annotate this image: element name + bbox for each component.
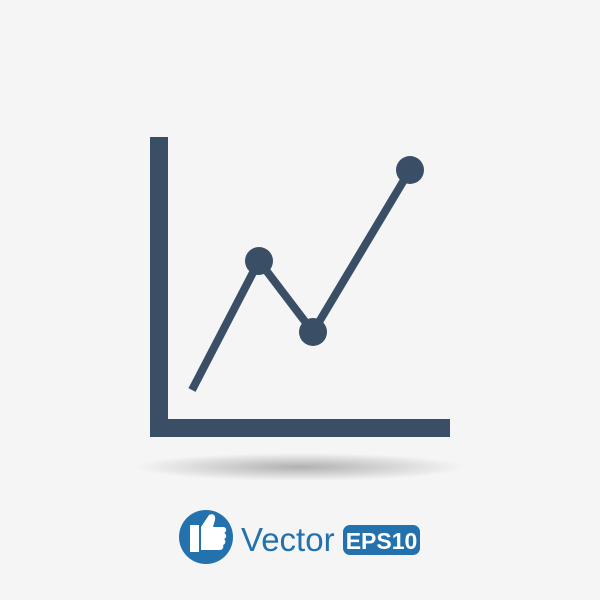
icon: thumbs up (179, 510, 233, 564)
badge: EPS10: EPS10 (346, 528, 417, 554)
logo: vector eps10 (179, 510, 420, 564)
trend line (192, 170, 410, 390)
shadow under chart (135, 453, 465, 481)
icon: line chart (150, 137, 450, 437)
axes (150, 137, 450, 437)
data points (245, 156, 424, 346)
text: Vector: Vector (241, 521, 335, 558)
